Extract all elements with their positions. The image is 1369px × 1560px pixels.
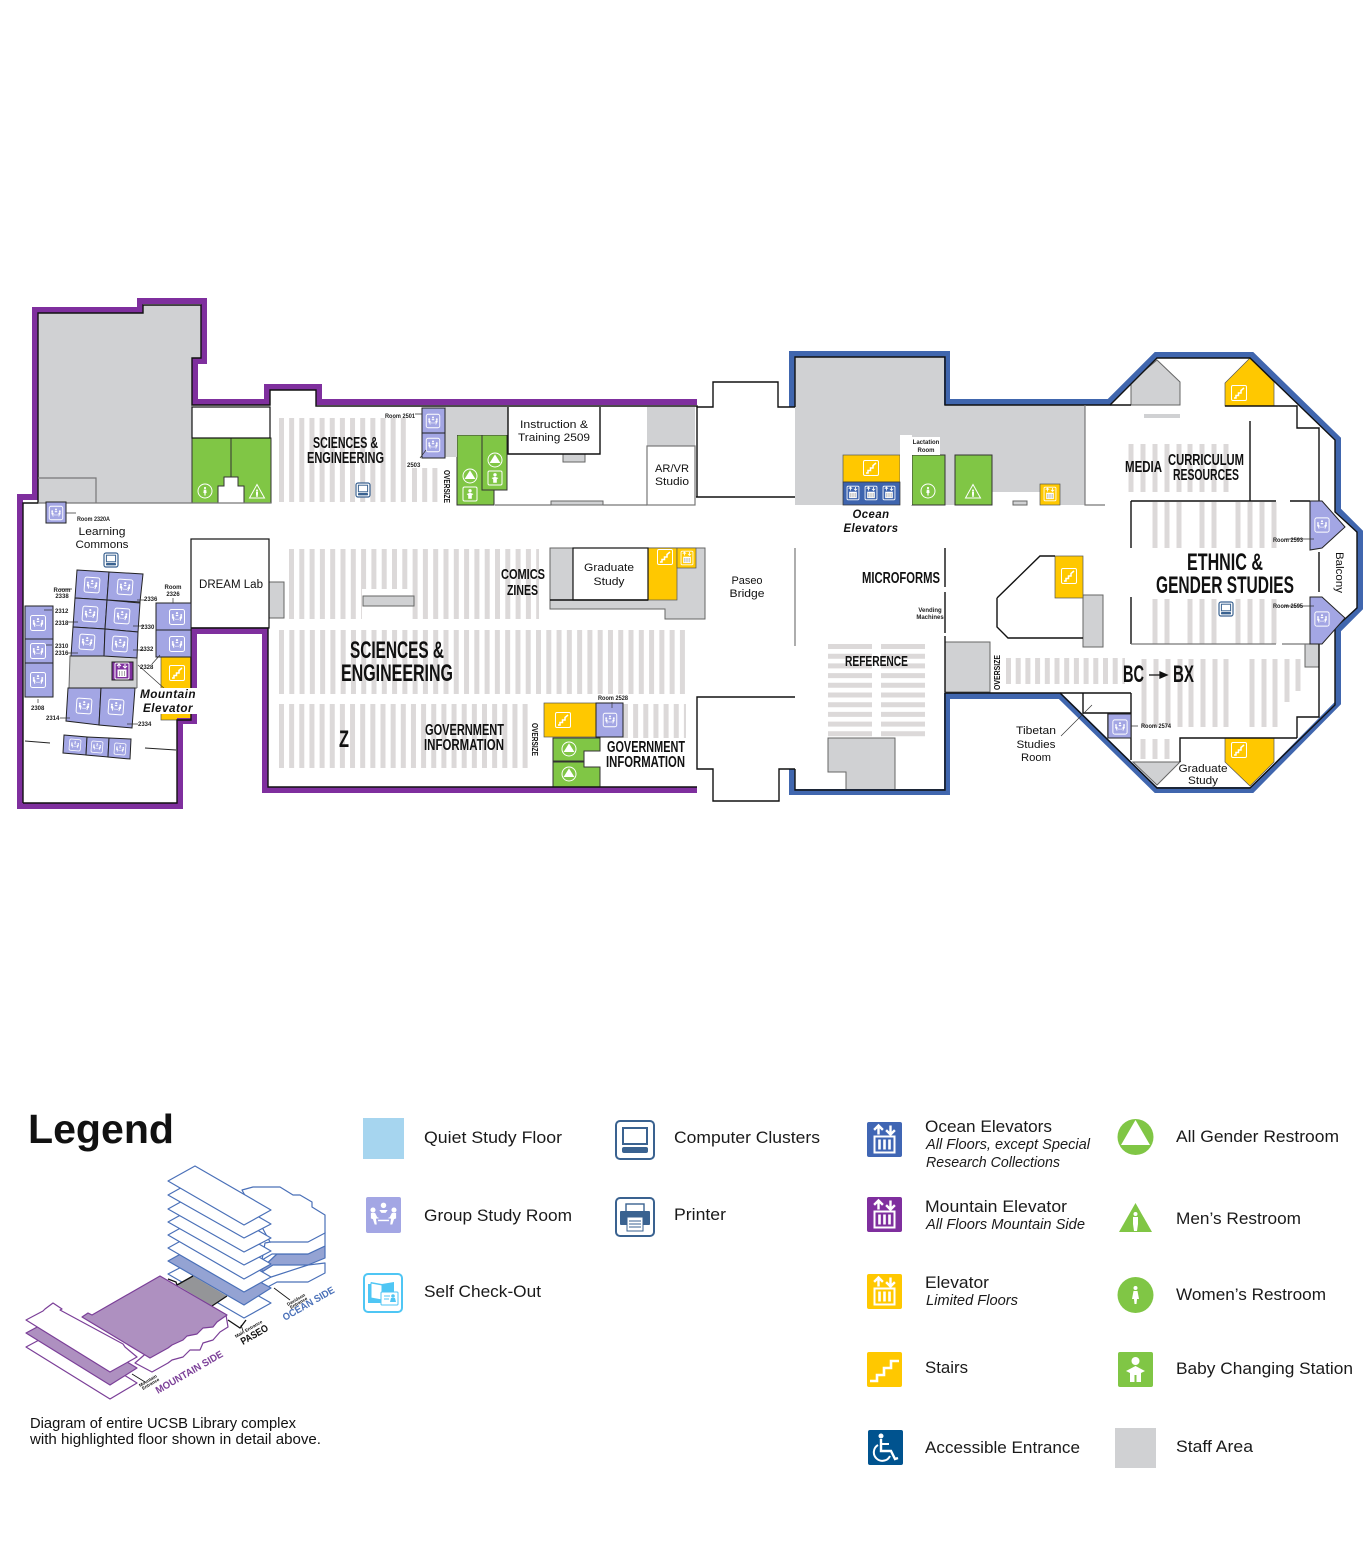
room 2316 bbox=[71, 627, 105, 656]
walls bbox=[23, 305, 1357, 803]
map labels: CURRICULUM bbox=[1168, 452, 1244, 469]
map labels: OVERSIZE bbox=[992, 655, 1002, 690]
isometric library diagram: Mountain bbox=[138, 1373, 158, 1388]
diagram caption: Diagram of entire UCSB Library complex bbox=[30, 1416, 297, 1432]
legend: staff area bbox=[1115, 1428, 1254, 1468]
restroom icons bbox=[198, 453, 980, 781]
room 2326 bbox=[156, 603, 191, 630]
map labels: Ocean bbox=[852, 507, 890, 521]
legend: all gender restroom: All Gender Restroom bbox=[1176, 1127, 1339, 1146]
mountain wing purple outline bbox=[20, 301, 697, 806]
map labels: 2334 bbox=[138, 722, 152, 728]
ocean wing blue outline bbox=[792, 354, 1360, 792]
map labels: Elevators bbox=[844, 521, 898, 535]
map labels: GENDER STUDIES bbox=[1156, 572, 1294, 599]
map labels: Commons bbox=[76, 539, 129, 551]
map labels: OVERSIZE bbox=[530, 723, 539, 757]
room 2528 bbox=[596, 703, 623, 737]
isometric library diagram: Entrance bbox=[289, 1296, 309, 1310]
map labels: Instruction & bbox=[520, 419, 589, 431]
map labels: GOVERNMENT bbox=[425, 722, 504, 739]
white rooms over gray bbox=[191, 407, 648, 628]
map labels: RESOURCES bbox=[1173, 467, 1239, 484]
map labels: Room bbox=[164, 585, 182, 591]
room 2338 bbox=[75, 570, 109, 600]
map labels: 2338 bbox=[55, 594, 69, 600]
room 2501 bbox=[422, 408, 445, 433]
map labels: DREAM Lab bbox=[199, 579, 263, 591]
room 2330 bbox=[105, 600, 140, 632]
map labels: AR/VR bbox=[655, 463, 689, 475]
map labels: MICROFORMS bbox=[862, 570, 940, 587]
ocean elevators blue panel bbox=[843, 482, 900, 505]
room 2595 bbox=[1310, 597, 1345, 644]
isometric library diagram: Davidson bbox=[286, 1292, 306, 1307]
room 2574 bbox=[1108, 714, 1131, 738]
group study rooms: central and ocean bbox=[422, 408, 1345, 738]
map labels: Study bbox=[1188, 775, 1219, 787]
map labels: BX bbox=[1173, 661, 1194, 688]
mountain elevator label background bbox=[137, 688, 198, 714]
legend: printer: Printer bbox=[674, 1205, 726, 1224]
legend: mountain elevator: All Floors Mountain Side bbox=[925, 1217, 1085, 1233]
legend: self check-out: Self Check-Out bbox=[424, 1282, 541, 1301]
map labels: Tibetan bbox=[1016, 725, 1056, 737]
map labels: MEDIA bbox=[1125, 459, 1162, 476]
room 2318 bbox=[73, 598, 107, 629]
legend: baby changing station bbox=[1118, 1352, 1353, 1387]
floor map bbox=[20, 301, 1360, 806]
legend: elevator: Limited Floors bbox=[926, 1293, 1018, 1309]
isometric library diagram: Entrance bbox=[141, 1377, 161, 1391]
legend: ocean elevators: Ocean Elevators bbox=[925, 1117, 1052, 1136]
map labels: Elevator bbox=[143, 701, 194, 715]
map labels: Graduate bbox=[1178, 763, 1228, 775]
legend: accessible entrance bbox=[868, 1430, 1080, 1465]
map labels: INFORMATION bbox=[606, 754, 685, 771]
shelving stacks: sciences and government bbox=[279, 662, 686, 736]
room 2308 bbox=[25, 663, 53, 697]
elevator icons bbox=[115, 486, 1056, 679]
map labels: BC bbox=[1123, 661, 1144, 688]
green restrooms bbox=[192, 435, 992, 787]
map labels bbox=[31, 414, 1345, 787]
map labels: 2316 bbox=[55, 651, 69, 657]
leader lines bbox=[38, 414, 1314, 736]
map labels: Room 2501 bbox=[385, 414, 416, 420]
gray service rooms bbox=[69, 360, 1319, 790]
legend: all gender restroom bbox=[1118, 1119, 1339, 1155]
group study rooms: learning commons bbox=[25, 502, 191, 759]
map labels: Vending bbox=[918, 608, 942, 614]
diagram caption bbox=[29, 1416, 321, 1448]
room 2503 bbox=[422, 433, 445, 458]
map labels: Studies bbox=[1016, 739, 1056, 751]
map labels: 2332 bbox=[140, 647, 154, 653]
mountain side floors bbox=[26, 1276, 228, 1399]
map labels: Balcony bbox=[1333, 552, 1345, 594]
shelving stacks: comics bbox=[289, 549, 539, 619]
legend: men's restroom bbox=[1119, 1203, 1301, 1232]
legend: accessible entrance: Accessible Entrance bbox=[925, 1438, 1080, 1457]
map labels: Room 2593 bbox=[1273, 538, 1304, 544]
ocean side floors bbox=[168, 1166, 325, 1318]
legend: ocean elevators: Research Collections bbox=[926, 1155, 1060, 1171]
legend: quiet study floor bbox=[363, 1118, 562, 1159]
map labels: Machines bbox=[916, 615, 944, 621]
map labels: ENGINEERING bbox=[307, 450, 384, 467]
paseo bridge bbox=[177, 1276, 227, 1306]
diagram caption: with highlighted floor shown in detail above. bbox=[29, 1432, 321, 1448]
room 2314 bbox=[66, 688, 101, 725]
mountain elevator bbox=[112, 662, 133, 680]
map labels: INFORMATION bbox=[424, 737, 504, 754]
map labels: Room bbox=[1021, 752, 1051, 764]
white gap in comics stacks bbox=[362, 589, 411, 620]
map labels: Study bbox=[594, 576, 625, 588]
legend: computer clusters: Computer Clusters bbox=[674, 1128, 820, 1147]
legend: computer clusters bbox=[616, 1121, 820, 1159]
map labels: 2503 bbox=[407, 463, 421, 469]
map labels: SCIENCES & bbox=[350, 637, 444, 664]
map labels: 2310 bbox=[55, 644, 69, 650]
legend: baby changing station: Baby Changing Station bbox=[1176, 1359, 1353, 1378]
map labels: Room 2528 bbox=[598, 696, 629, 702]
map labels: Z bbox=[339, 726, 349, 753]
map labels: ETHNIC & bbox=[1187, 549, 1263, 576]
legend: women's restroom bbox=[1118, 1277, 1326, 1313]
map labels: SCIENCES & bbox=[313, 435, 378, 452]
legend: group study room: Group Study Room bbox=[424, 1206, 572, 1225]
legend: printer bbox=[616, 1198, 726, 1236]
legend: ocean elevators: All Floors, except Special bbox=[925, 1137, 1091, 1153]
map labels: Lactation bbox=[913, 440, 940, 446]
map labels: 2308 bbox=[31, 706, 45, 712]
map icons bbox=[104, 386, 1246, 781]
map labels: Training 2509 bbox=[518, 432, 590, 444]
legend: stairs: Stairs bbox=[925, 1358, 968, 1377]
map labels: Paseo bbox=[732, 575, 762, 587]
isometric library diagram bbox=[26, 1166, 337, 1399]
map labels: 2314 bbox=[46, 716, 60, 722]
diagram side labels: OCEAN SIDE bbox=[281, 1285, 337, 1324]
map labels: 2326 bbox=[166, 592, 180, 598]
room 2332 bbox=[104, 629, 138, 658]
mountain side staff area bbox=[38, 305, 201, 503]
room 2336 bbox=[107, 572, 143, 602]
map labels: 2328 bbox=[140, 665, 154, 671]
white cut-outs bbox=[900, 435, 940, 505]
isometric library diagram: PASEO bbox=[239, 1323, 271, 1348]
map labels: 2318 bbox=[55, 621, 69, 627]
strip rooms bbox=[63, 735, 131, 759]
room 2320A bbox=[46, 502, 66, 523]
shelving stacks: reference bbox=[850, 644, 903, 737]
ocean side staff area bbox=[795, 357, 1085, 505]
map labels: Room bbox=[918, 448, 934, 454]
room 2310 bbox=[25, 639, 53, 663]
map labels: Graduate bbox=[584, 562, 634, 574]
learning commons: Learning bbox=[78, 526, 126, 538]
legend: stairs bbox=[867, 1352, 968, 1387]
room 2593 bbox=[1310, 501, 1345, 550]
legend: staff area: Staff Area bbox=[1176, 1437, 1254, 1456]
shelving stacks: north sciences bbox=[279, 460, 438, 485]
legend: quiet study floor: Quiet Study Floor bbox=[424, 1128, 562, 1147]
map labels: COMICS bbox=[501, 566, 545, 583]
map labels: Bridge bbox=[730, 588, 764, 600]
room 2328 bbox=[156, 630, 191, 657]
map labels: Room 2320A bbox=[77, 517, 111, 523]
map labels: OVERSIZE bbox=[442, 470, 451, 504]
map labels: Studio bbox=[655, 476, 689, 488]
legend: group study room bbox=[366, 1197, 572, 1233]
legend: elevator bbox=[867, 1273, 1018, 1309]
map labels: 2312 bbox=[55, 609, 69, 615]
map labels: Room bbox=[54, 588, 70, 594]
yellow stairs and elevators bbox=[161, 358, 1274, 786]
room 2334 bbox=[99, 688, 135, 728]
legend: mountain elevator bbox=[867, 1197, 1085, 1233]
legend: women's restroom: Women’s Restroom bbox=[1176, 1285, 1326, 1304]
map labels: Mountain bbox=[140, 687, 196, 701]
computer icons bbox=[104, 483, 1233, 616]
stairs icons bbox=[170, 386, 1246, 758]
map labels: REFERENCE bbox=[845, 653, 908, 670]
map labels: ZINES bbox=[507, 582, 538, 599]
legend: ocean elevators bbox=[867, 1117, 1091, 1171]
map labels: 2336 bbox=[144, 597, 158, 603]
shelving stacks: ocean wing bbox=[1006, 444, 1298, 759]
legend: men's restroom: Men’s Restroom bbox=[1176, 1209, 1301, 1228]
legend: self check-out bbox=[364, 1274, 541, 1312]
map labels: Room 2574 bbox=[1141, 724, 1172, 730]
map labels: 2330 bbox=[141, 625, 155, 631]
isometric library diagram: MOUNTAIN SIDE bbox=[154, 1349, 226, 1397]
isometric library diagram: Main Entrance bbox=[234, 1319, 264, 1339]
map labels: GOVERNMENT bbox=[607, 739, 685, 756]
map labels: ENGINEERING bbox=[341, 660, 453, 687]
legend: elevator: Elevator bbox=[925, 1273, 989, 1292]
room 2312 bbox=[25, 606, 53, 639]
map labels: Room 2595 bbox=[1273, 604, 1304, 610]
legend: mountain elevator: Mountain Elevator bbox=[925, 1197, 1067, 1216]
legend title: Legend bbox=[28, 1106, 174, 1152]
